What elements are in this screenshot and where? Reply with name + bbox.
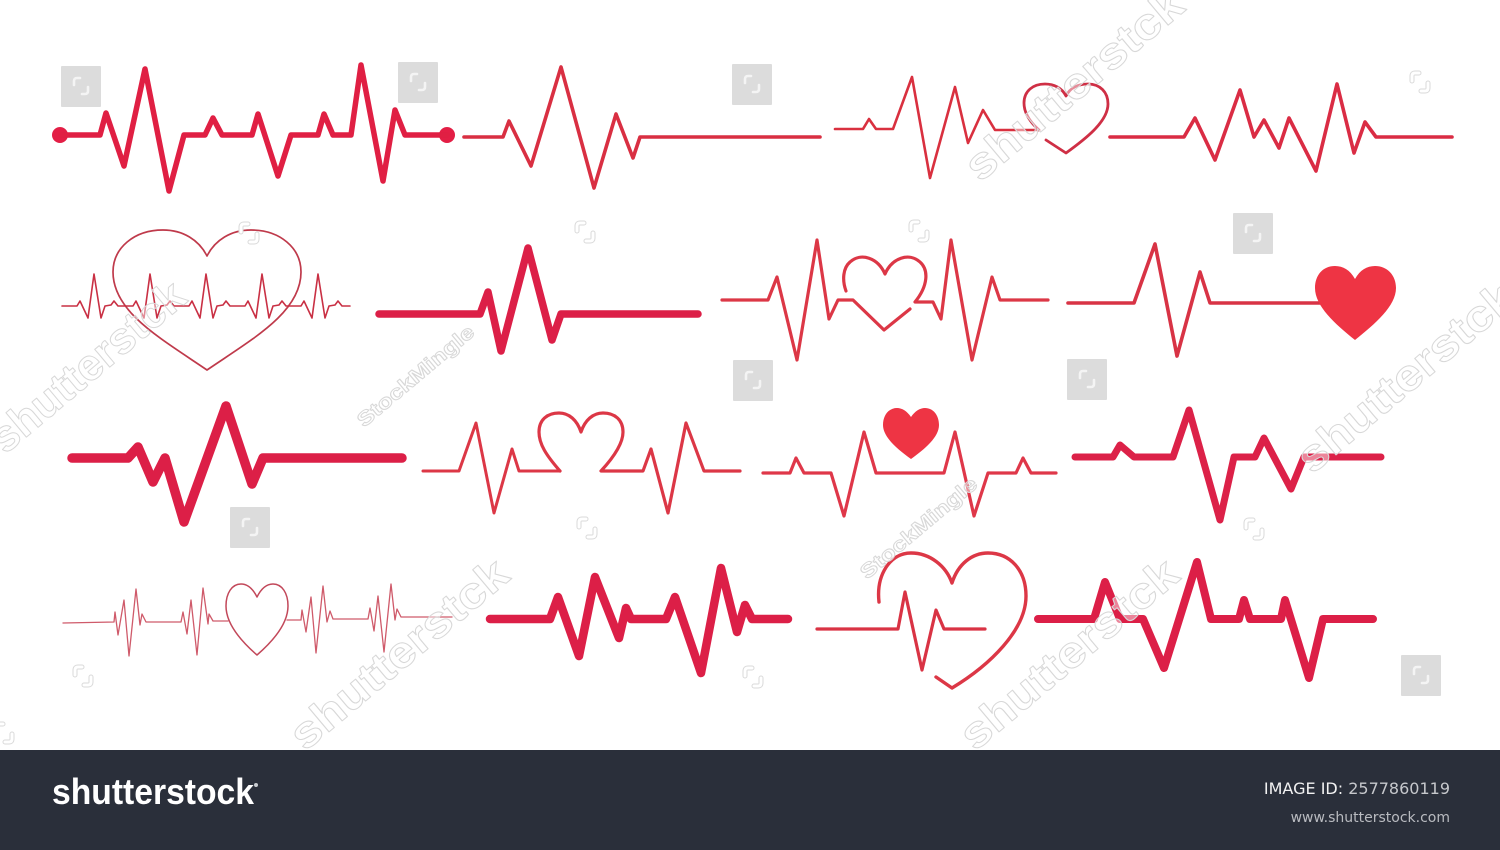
image id: IMAGE ID: 2577860119 xyxy=(1264,779,1450,798)
thick pulse line: row 2, second xyxy=(379,248,698,351)
watermark overlays: StockMingle xyxy=(353,321,479,432)
watermark overlays: shutterstck xyxy=(280,548,519,760)
pulse line with heart arch: row 3, second xyxy=(423,423,560,513)
pulse line inside large open heart: row 4, third xyxy=(817,553,1026,688)
pulse line: row 1, line with dots at the ends xyxy=(52,65,455,191)
heart arch continuing row 3 line xyxy=(539,413,740,513)
pulse line: row 1, fourth xyxy=(1110,84,1452,171)
watermark overlays: shutterstck xyxy=(955,0,1194,191)
pulse line: row 1, second xyxy=(464,67,820,188)
pulse line under solid heart: row 3, third xyxy=(763,408,1056,516)
watermark overlays: shutterstck xyxy=(1287,271,1500,483)
thick pulse line: row 4, fourth xyxy=(1038,562,1373,678)
pulse line ending in solid heart: row 2, fourth xyxy=(1068,244,1396,356)
logo registered mark xyxy=(254,783,258,787)
heavy pulse line: row 3, first xyxy=(72,406,402,522)
website: www.shutterstock.com xyxy=(1291,810,1450,826)
pulse line with outline heart: row 1, third xyxy=(835,77,1108,178)
thin pulse line across large outline heart: row 2, first xyxy=(62,230,350,370)
watermark overlays: StockMingle xyxy=(856,473,982,584)
pulse line with interrupted heart: row 2, third xyxy=(722,240,1048,360)
footer logo: shutterstock xyxy=(52,771,255,812)
thick pulse line: row 3, fourth xyxy=(1075,410,1381,520)
very thin pulse line with outline heart: row 4, first xyxy=(63,584,452,656)
footer bar xyxy=(0,750,1500,850)
watermark overlays: shutterstck xyxy=(950,548,1189,760)
thick pulse line: row 4, second xyxy=(490,568,788,673)
